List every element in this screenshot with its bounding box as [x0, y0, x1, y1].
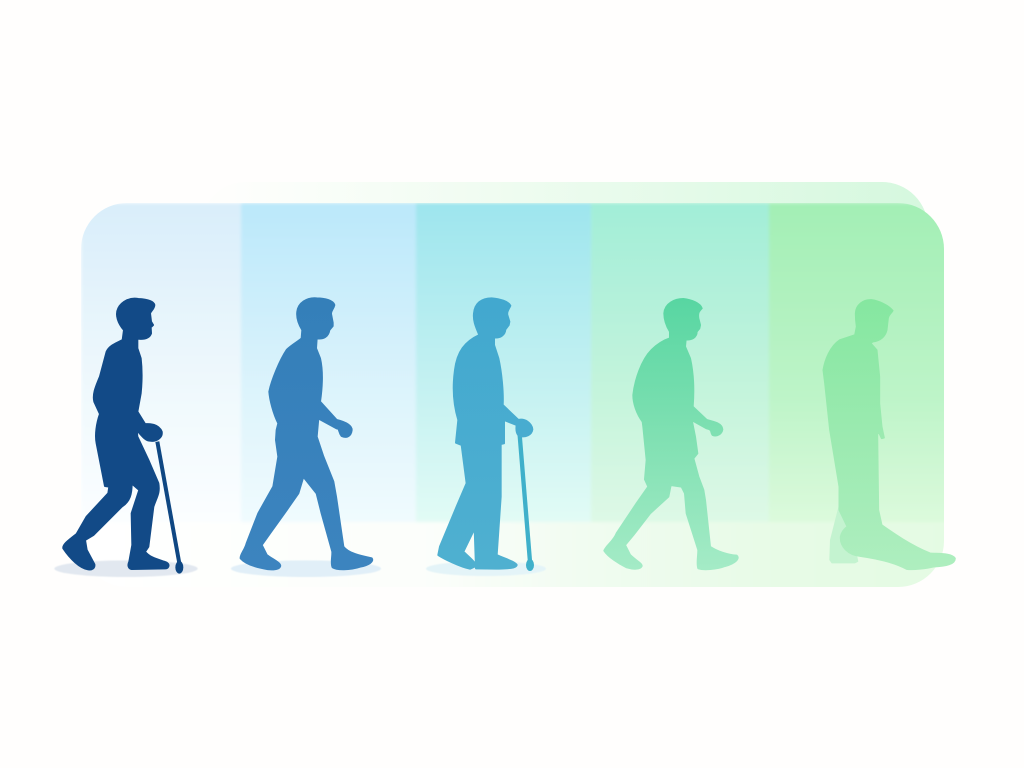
infographic: five walking figures progression [54, 182, 956, 587]
figure 3: light blue walker with cane [426, 298, 546, 576]
figure 2: mid blue walker [231, 298, 381, 577]
panel: five-column gradient [70, 195, 954, 595]
figure 4: green walker [604, 299, 738, 569]
back offset panel [200, 182, 928, 302]
figure 1: dark blue walker with cane [54, 299, 198, 577]
figure 5: faded green figure with long foot [823, 300, 955, 569]
